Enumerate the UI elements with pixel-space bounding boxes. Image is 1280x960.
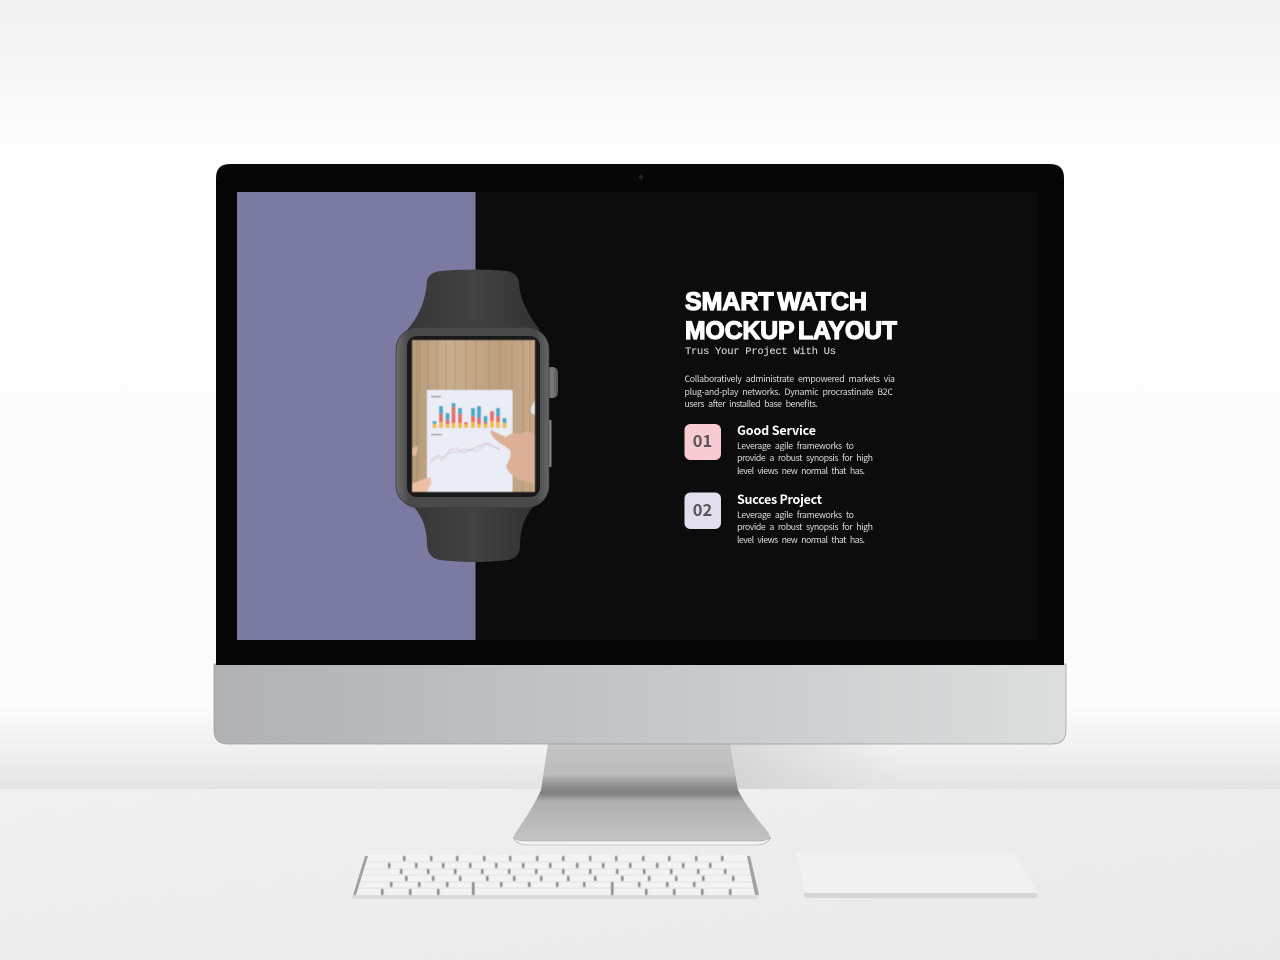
number 01: 01 (693, 428, 712, 452)
description 02: provide a robust synopsis for high (737, 520, 873, 533)
watch screen photo (412, 340, 535, 492)
description 02 (737, 508, 873, 546)
watch band top (407, 270, 540, 330)
number 02: 02 (693, 497, 712, 521)
subtitle: Trus Your Project With Us (685, 346, 836, 358)
monitor (214, 164, 1066, 845)
monitor chin (214, 664, 1066, 744)
description 01: provide a robust synopsis for high (737, 451, 873, 464)
intro paragraph: plug-and-play networks. Dynamic procrastinate B2C (684, 385, 893, 398)
description 02: level views new normal that has. (737, 533, 865, 546)
heading good service: Good Service (737, 420, 816, 439)
watch band bottom (412, 505, 535, 562)
paper (427, 390, 512, 492)
line chart (430, 443, 500, 463)
intro paragraph (684, 372, 895, 410)
keyboard (352, 855, 759, 899)
screen (237, 192, 1038, 640)
description 01: Leverage agile frameworks to (737, 439, 854, 452)
desk surface (0, 789, 1280, 960)
thumb (412, 446, 418, 456)
description 01: level views new normal that has. (737, 464, 865, 477)
item 01 (684, 420, 873, 477)
heading: SMART WATCH (685, 288, 867, 316)
hand left (412, 477, 431, 492)
intro paragraph: users after installed base benefits. (684, 397, 818, 410)
bar chart (432, 403, 506, 428)
badge 02 (684, 492, 721, 529)
description 02: Leverage agile frameworks to (737, 508, 854, 521)
monitor stand (513, 744, 900, 845)
white object (531, 400, 535, 415)
heading (685, 288, 897, 345)
trackpad (797, 853, 1037, 898)
hand right (491, 430, 535, 484)
watch crown (546, 367, 558, 398)
heading: MOCKUP LAYOUT (685, 317, 897, 345)
watch case (396, 328, 549, 508)
monitor bezel (216, 164, 1064, 665)
badge 01 (684, 424, 721, 460)
purple panel (237, 192, 476, 640)
smart watch (396, 270, 558, 562)
camera (639, 175, 643, 179)
heading succes project: Succes Project (737, 489, 823, 508)
watch side button (548, 420, 552, 467)
description 01 (737, 439, 873, 477)
item 02 (684, 489, 873, 546)
intro paragraph: Collaboratively administrate empowered markets via (684, 372, 895, 385)
